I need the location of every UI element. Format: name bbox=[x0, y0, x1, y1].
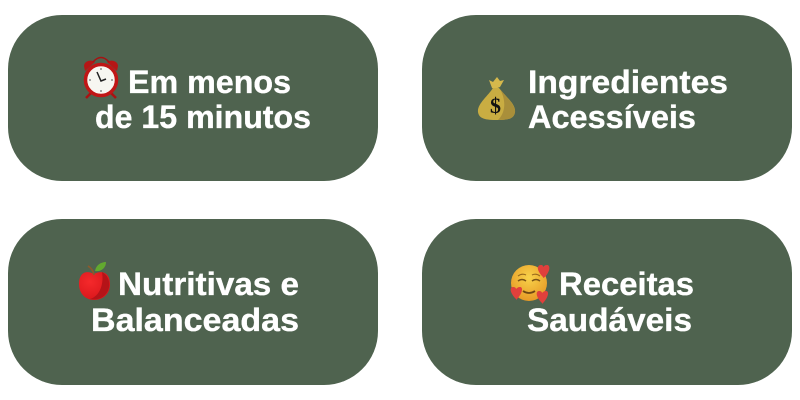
panel: nutritivas e balanceadas bbox=[8, 219, 378, 385]
heading: de 15 minutos: de 15 minutos bbox=[95, 99, 311, 135]
panel: receitas saudáveis bbox=[422, 219, 792, 385]
heading: em menos: Em menos bbox=[128, 64, 291, 100]
icon: apple bbox=[79, 262, 110, 300]
heading: ingredientes: Ingredientes bbox=[528, 64, 728, 100]
panel: ingredientes acessíveis bbox=[422, 15, 792, 181]
icon: money bag: $ bbox=[490, 93, 501, 118]
icon: money bag bbox=[478, 77, 515, 120]
heading: receitas: Receitas bbox=[559, 266, 694, 302]
heading: acessíveis: Acessíveis bbox=[528, 99, 696, 135]
icon: smiling face with hearts bbox=[511, 265, 549, 304]
panel: em menos de 15 minutos bbox=[8, 15, 378, 181]
icon: alarm clock bbox=[84, 58, 118, 98]
heading: saudáveis: Saudáveis bbox=[527, 302, 692, 338]
heading: nutritivas e: Nutritivas e bbox=[118, 266, 299, 302]
heading: balanceadas: Balanceadas bbox=[91, 302, 299, 338]
